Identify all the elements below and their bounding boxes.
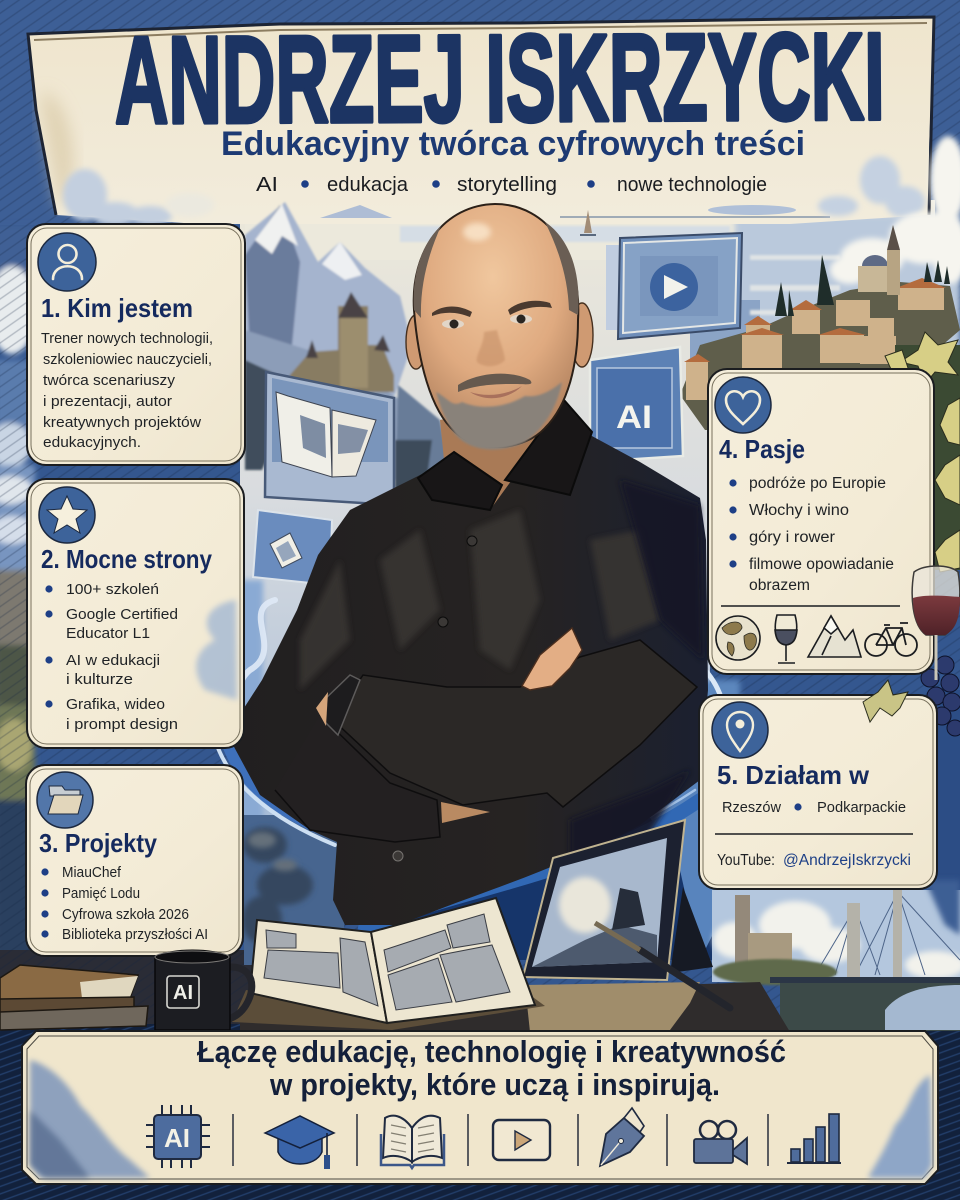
topic line: storytelling bbox=[457, 174, 557, 196]
card: image window bbox=[253, 510, 332, 585]
bullet list: 100+ szkoleń bbox=[66, 581, 159, 598]
hillside town bbox=[680, 225, 960, 430]
mug with AI logo: AI bbox=[173, 982, 193, 1004]
body text: kreatywnych projektów bbox=[43, 414, 201, 431]
card: AI screen bbox=[590, 347, 683, 462]
heading: 2. Mocne strony bbox=[41, 544, 212, 574]
scene: central pale landscape bbox=[233, 200, 960, 920]
neck bbox=[440, 395, 565, 510]
YouTube handle bbox=[717, 852, 911, 869]
location text bbox=[722, 799, 906, 816]
clouds bbox=[63, 136, 960, 284]
icon: graduation cap bbox=[265, 1116, 334, 1169]
panel 1: who I am bbox=[27, 224, 245, 465]
beard bbox=[436, 382, 562, 450]
tagline bbox=[197, 1034, 786, 1102]
forehead highlight bbox=[463, 223, 491, 241]
location text: Rzeszów bbox=[722, 799, 781, 816]
topic line: edukacja bbox=[327, 174, 409, 196]
icon: AI chip bbox=[146, 1105, 210, 1168]
collar bbox=[418, 452, 502, 510]
bullet list: filmowe opowiadanie bbox=[749, 556, 894, 573]
icon: growth bars bbox=[787, 1114, 841, 1163]
grape leaf over panel 5 bbox=[863, 680, 908, 722]
panel 5: location bbox=[699, 695, 937, 889]
ears bbox=[406, 315, 426, 369]
heading: 1. Kim jestem bbox=[41, 293, 193, 323]
bullet list: Pamięć Lodu bbox=[62, 886, 140, 902]
bullet list: Włochy i wino bbox=[749, 502, 849, 519]
topic line: nowe technologie bbox=[617, 174, 767, 196]
head bbox=[414, 204, 578, 447]
bullet list: góry i rower bbox=[749, 529, 835, 546]
panel 3: projects bbox=[26, 765, 243, 956]
bullet list: podróże po Europie bbox=[749, 475, 886, 492]
icon: heart bbox=[715, 377, 771, 433]
nose bbox=[477, 330, 505, 366]
forest behind lower left bbox=[242, 815, 344, 965]
blue wave behind lower torso bbox=[345, 760, 740, 960]
lower sleeve and cuff bbox=[275, 715, 440, 842]
heading: 4. Pasje bbox=[719, 434, 805, 464]
mouth bbox=[470, 386, 522, 398]
body text: Trener nowych technologii, bbox=[41, 330, 213, 347]
icon: open book bbox=[381, 1116, 444, 1168]
subtitle: Edukacyjny twórca cyfrowych treści bbox=[221, 125, 805, 163]
icon: movie camera bbox=[694, 1121, 747, 1164]
icon: AI chip: AI bbox=[164, 1123, 190, 1153]
mountains and castle bbox=[240, 202, 450, 510]
icon: mountains bbox=[808, 616, 861, 657]
icon: folder bbox=[37, 772, 93, 828]
mug with AI logo bbox=[155, 950, 252, 1030]
grapes bbox=[921, 656, 960, 736]
YouTube handle: YouTube: bbox=[717, 852, 775, 869]
body text bbox=[41, 330, 213, 451]
shirt buttons bbox=[467, 536, 477, 546]
bullet list: MiauChef bbox=[62, 865, 122, 881]
figure: man with crossed arms bbox=[233, 204, 708, 925]
icon: fountain pen bbox=[600, 1108, 644, 1166]
watercolor corners bbox=[30, 1060, 150, 1178]
bottom dark band bbox=[0, 1024, 960, 1200]
hand under arm bbox=[441, 802, 490, 823]
location text: Podkarpackie bbox=[817, 799, 906, 816]
side hair bbox=[414, 226, 441, 318]
tagline: Łączę edukację, technologię i kreatywność bbox=[197, 1034, 786, 1069]
wine glass decoration bbox=[912, 566, 960, 680]
stack of books bbox=[0, 965, 148, 1030]
tagline: w projekty, które uczą i inspirują. bbox=[269, 1067, 720, 1102]
swirling light streams bbox=[211, 600, 724, 928]
bullet list: Grafika, wideo bbox=[66, 696, 165, 713]
panel 2: strengths bbox=[27, 479, 244, 748]
heading: 5. Działam w bbox=[717, 760, 870, 790]
icon: location pin bbox=[712, 702, 768, 758]
castle bbox=[290, 292, 394, 392]
eyebrows bbox=[432, 306, 472, 317]
sea and sailboat bbox=[320, 205, 830, 242]
heading: 3. Projekty bbox=[39, 828, 157, 858]
bullet list bbox=[729, 475, 894, 594]
bullet list bbox=[41, 865, 208, 943]
footer panel bbox=[22, 1031, 938, 1184]
body text: szkoleniowiec nauczycieli, bbox=[43, 351, 212, 368]
card: AI screen: AI bbox=[616, 399, 652, 435]
bridge and town, lower right bbox=[712, 880, 960, 1031]
wristwatch bbox=[322, 675, 360, 735]
wrist skin bbox=[316, 692, 328, 726]
icon row bbox=[146, 1105, 841, 1169]
bullet list bbox=[45, 581, 178, 733]
storyboard book bbox=[232, 898, 545, 1030]
icon: star bbox=[39, 487, 95, 543]
panel 4: passions bbox=[708, 369, 934, 674]
card: digital book bbox=[265, 372, 394, 505]
icon: globe bbox=[716, 616, 760, 660]
body text: edukacyjnych. bbox=[43, 434, 141, 451]
bullet list: i kulturze bbox=[66, 671, 133, 688]
vines and leaves bbox=[885, 332, 960, 572]
eyes bbox=[442, 320, 464, 328]
stone table bbox=[240, 982, 790, 1035]
bullet list: AI w edukacji bbox=[66, 652, 160, 669]
upper forearm bbox=[333, 640, 697, 807]
bullet list: Educator L1 bbox=[66, 625, 150, 642]
icon: video play bbox=[493, 1120, 550, 1160]
card: video player bbox=[606, 233, 742, 339]
hand on sleeve bbox=[522, 628, 582, 690]
icon: wine glass bbox=[775, 615, 797, 663]
bullet list: Biblioteka przyszłości AI bbox=[62, 927, 208, 943]
topic line: AI bbox=[256, 174, 278, 196]
bullet list: obrazem bbox=[749, 577, 810, 594]
bullet list: Google Certified bbox=[66, 606, 178, 623]
bullet list: Cyfrowa szkoła 2026 bbox=[62, 907, 189, 923]
highlights on shirt bbox=[300, 510, 660, 690]
shirt torso and arms bbox=[233, 400, 708, 925]
tablet on stand bbox=[523, 820, 730, 1008]
YouTube handle: @AndrzejIskrzycki bbox=[783, 852, 911, 869]
bullet list: i prompt design bbox=[66, 716, 178, 733]
banner: name plate bbox=[28, 17, 934, 224]
topic line bbox=[256, 174, 767, 196]
icon: bicycle bbox=[865, 623, 917, 656]
body text: i prezentacji, autor bbox=[43, 393, 172, 410]
body text: twórca scenariuszy bbox=[43, 372, 176, 389]
pen bbox=[640, 950, 730, 1008]
icon: person bbox=[38, 233, 96, 291]
